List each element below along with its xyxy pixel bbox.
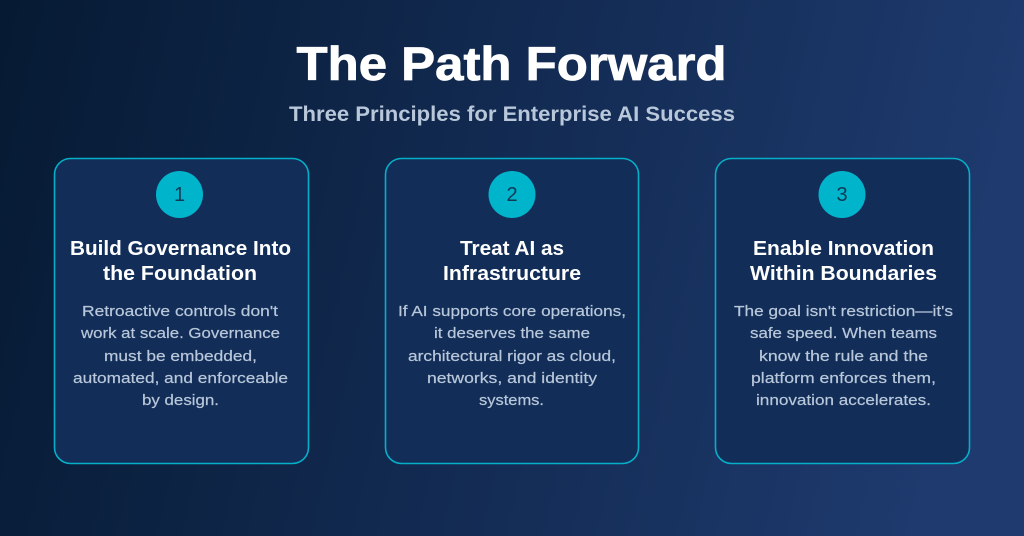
title: The Path Forward (296, 37, 726, 90)
panel: principle 2 (386, 158, 638, 464)
number badge 3: 3 (836, 184, 848, 206)
body text 2 (398, 303, 626, 409)
body text 3 (734, 303, 953, 409)
heading 1 (70, 238, 291, 285)
panel: principle 3 (716, 158, 970, 464)
body text 2: it deserves the same (434, 325, 590, 342)
body text 2: networks, and identity (427, 370, 598, 387)
body text 2: systems. (479, 392, 544, 409)
heading 3: Enable Innovation (753, 238, 934, 260)
body text 1 (73, 303, 288, 409)
panel: principle 1 (54, 158, 308, 464)
heading 3: Within Boundaries (750, 263, 937, 285)
body text 3: safe speed. When teams (750, 325, 937, 342)
number badge 3 (818, 171, 866, 218)
heading 2: Treat AI as (460, 238, 564, 260)
body text 3: platform enforces them, (751, 370, 936, 387)
heading 1: the Foundation (103, 263, 257, 285)
body text 3: know the rule and the (759, 348, 928, 365)
body text 1: work at scale. Governance (80, 325, 280, 342)
heading 3 (750, 238, 937, 285)
body text 2: If AI supports core operations, (398, 303, 626, 320)
number badge 2 (488, 171, 536, 218)
number badge 1 (156, 171, 203, 218)
body text 1: by design. (142, 392, 219, 409)
heading 2 (443, 238, 581, 285)
body text 1: Retroactive controls don't (82, 303, 279, 320)
body text 1: must be embedded, (104, 348, 257, 365)
heading 1: Build Governance Into (70, 238, 291, 260)
number badge 1: 1 (174, 184, 185, 206)
body text 2: architectural rigor as cloud, (408, 348, 616, 365)
number badge 2: 2 (506, 184, 518, 206)
heading 2: Infrastructure (443, 263, 581, 285)
body text 3: innovation accelerates. (756, 392, 931, 409)
body text 1: automated, and enforceable (73, 370, 288, 387)
body text 3: The goal isn't restriction—it's (734, 303, 953, 320)
subtitle: Three Principles for Enterprise AI Success (289, 103, 735, 126)
